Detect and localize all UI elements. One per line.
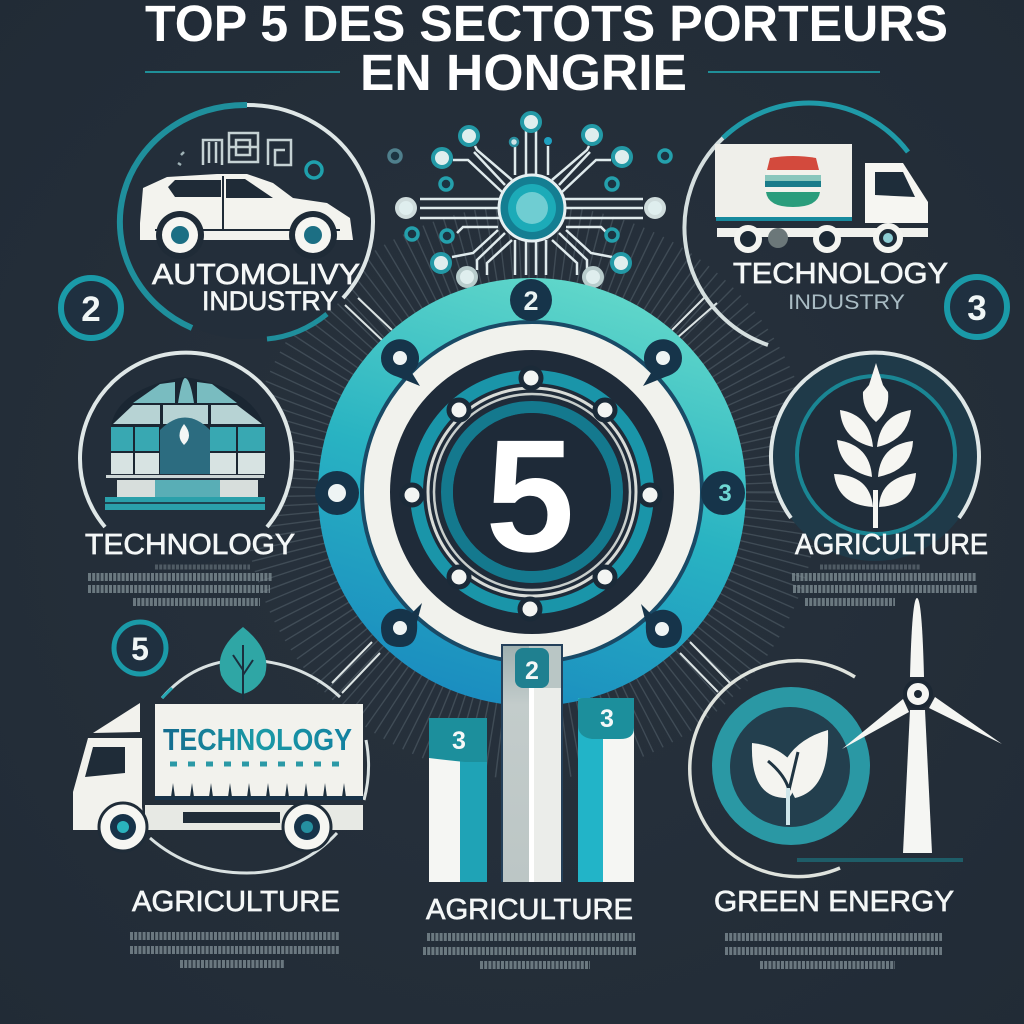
bar chart xyxy=(429,644,634,882)
panel: technology dome xyxy=(80,353,295,602)
icon: flag xyxy=(765,156,821,207)
outer badges xyxy=(315,279,745,648)
bar chart: 3 xyxy=(600,705,614,733)
panel: automotive industry: AUTOMOLIVY xyxy=(152,259,360,291)
panel: green energy: GREEN ENERGY xyxy=(714,886,954,918)
label: agriculture centre xyxy=(423,894,637,965)
text block: description xyxy=(88,567,272,602)
badge: 3 xyxy=(947,277,1007,337)
label: agriculture centre: AGRICULTURE xyxy=(426,894,633,926)
icon: car xyxy=(140,174,353,259)
title: EN HONGRIE xyxy=(360,44,687,101)
panel: truck with flag: INDUSTRY xyxy=(788,291,905,314)
badge: 2: 2 xyxy=(81,290,101,329)
icon: leaf xyxy=(220,627,266,700)
central dial: 2 xyxy=(523,286,539,316)
icon: sprout xyxy=(752,730,828,825)
central dial xyxy=(315,278,746,706)
bar chart: 3 xyxy=(452,727,466,755)
icon: truck: TECHNOLOGY xyxy=(163,722,352,757)
panel: automotive industry: INDUSTRY xyxy=(202,286,338,316)
panel: agriculture wheat xyxy=(771,353,988,602)
text block: description xyxy=(423,937,637,965)
panel: technology dome: TECHNOLOGY xyxy=(85,529,295,561)
badge: 5 xyxy=(114,622,166,674)
chip icon: network at top xyxy=(389,113,671,286)
dial nodes xyxy=(402,368,660,619)
badge: 2 xyxy=(61,278,121,338)
text block: description xyxy=(130,936,340,964)
icon: wind turbine xyxy=(842,598,1002,853)
label: agriculture left: AGRICULTURE xyxy=(132,886,340,918)
panel: automotive industry xyxy=(120,105,373,339)
icon: truck xyxy=(73,703,363,851)
panel: green energy xyxy=(690,598,1002,965)
icon: truck xyxy=(715,144,928,250)
badge: 3: 3 xyxy=(967,289,987,328)
panel: truck with flag: TECHNOLOGY xyxy=(733,258,948,290)
badge: 5: 5 xyxy=(131,631,149,667)
icon: dome building xyxy=(105,377,265,510)
radiating lines around centre xyxy=(281,242,781,742)
text block: description xyxy=(792,567,977,602)
panel: technology truck xyxy=(73,627,369,873)
bar chart: 2 xyxy=(525,657,539,685)
title xyxy=(145,0,948,101)
panel: agriculture wheat: AGRICULTURE xyxy=(795,529,988,561)
icon: symbols above car xyxy=(178,133,322,178)
label: agriculture left xyxy=(130,886,340,964)
panel: truck with flag xyxy=(685,103,948,345)
central dial: 3 xyxy=(718,480,732,507)
icon: wheat xyxy=(834,363,916,528)
text block: description xyxy=(725,937,942,965)
number 5: 5 xyxy=(486,406,574,585)
